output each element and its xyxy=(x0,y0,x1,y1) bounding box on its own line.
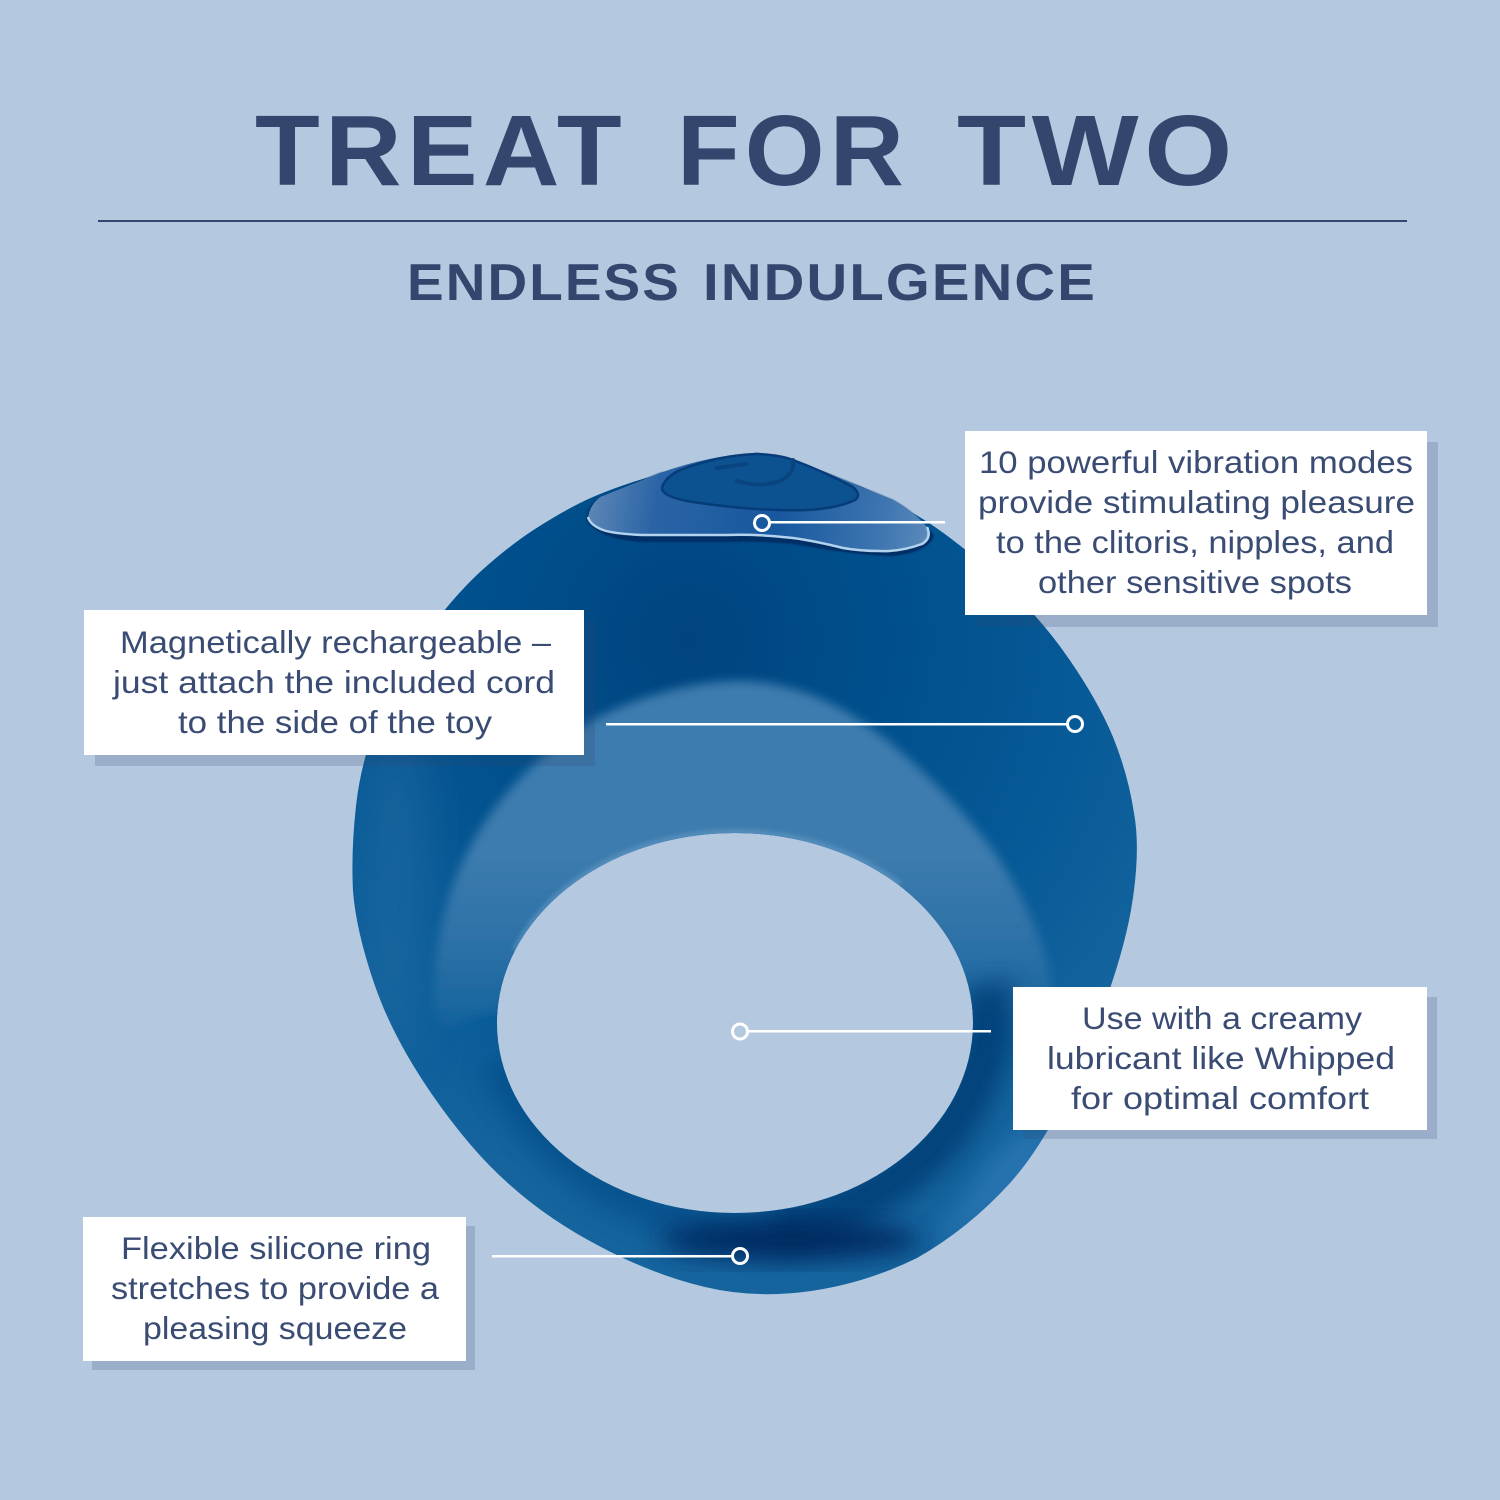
lighter inner band xyxy=(434,681,1054,1045)
callout: flexible ring: pleasing squeeze xyxy=(143,1310,407,1346)
callout: vibration modes xyxy=(965,431,1438,627)
subtitle: ENDLESS xyxy=(407,254,681,312)
leader: flexible ring xyxy=(492,1248,748,1264)
callout: lubricant: lubricant like Whipped xyxy=(1047,1040,1395,1076)
subtitle xyxy=(407,254,1097,312)
lower right light xyxy=(948,1130,1048,1236)
callout: vibration modes: provide stimulating pleasure xyxy=(978,484,1415,520)
callout: lubricant: for optimal comfort xyxy=(1071,1080,1369,1116)
callout: flexible ring: stretches to provide a xyxy=(111,1270,440,1306)
callout: flexible ring xyxy=(83,1217,475,1370)
leader: rechargeable xyxy=(606,716,1082,732)
hole top rim highlight xyxy=(515,832,900,950)
callout: vibration modes: to the clitoris, nipples, and xyxy=(996,524,1394,560)
callout: vibration modes: other sensitive spots xyxy=(1038,564,1352,600)
dark left lower inner wall xyxy=(500,1060,770,1232)
button plate xyxy=(586,453,934,556)
callout: vibration modes: 10 powerful vibration modes xyxy=(979,444,1413,480)
callout: rechargeable: to the side of the toy xyxy=(178,704,492,740)
title: FOR xyxy=(677,95,909,207)
power icon xyxy=(717,460,793,484)
callout: lubricant: Use with a creamy xyxy=(1082,1000,1362,1036)
title: TREAT xyxy=(255,95,627,207)
darkest bottom xyxy=(660,1220,920,1260)
power button xyxy=(662,454,858,510)
leader: vibration modes xyxy=(754,516,945,530)
plate rim highlight xyxy=(588,517,929,551)
title: TWO xyxy=(957,95,1238,207)
title xyxy=(255,95,1238,207)
callout: rechargeable xyxy=(84,610,595,766)
left soft light xyxy=(362,755,435,1010)
callout: lubricant xyxy=(1013,987,1437,1139)
glossy plate xyxy=(588,453,929,551)
plate shadow xyxy=(586,453,934,556)
dark right and bottom inner wall xyxy=(770,985,988,1232)
callout: rechargeable: Magnetically rechargeable – xyxy=(120,624,552,660)
subtitle: INDULGENCE xyxy=(703,254,1097,312)
leader: lubricant xyxy=(732,1024,991,1039)
product: silicone ring xyxy=(340,440,1150,1310)
callout: rechargeable: just attach the included cord xyxy=(112,664,555,700)
callout: flexible ring: Flexible silicone ring xyxy=(121,1230,431,1266)
ring body xyxy=(340,440,1150,1310)
divider line xyxy=(98,220,1407,222)
